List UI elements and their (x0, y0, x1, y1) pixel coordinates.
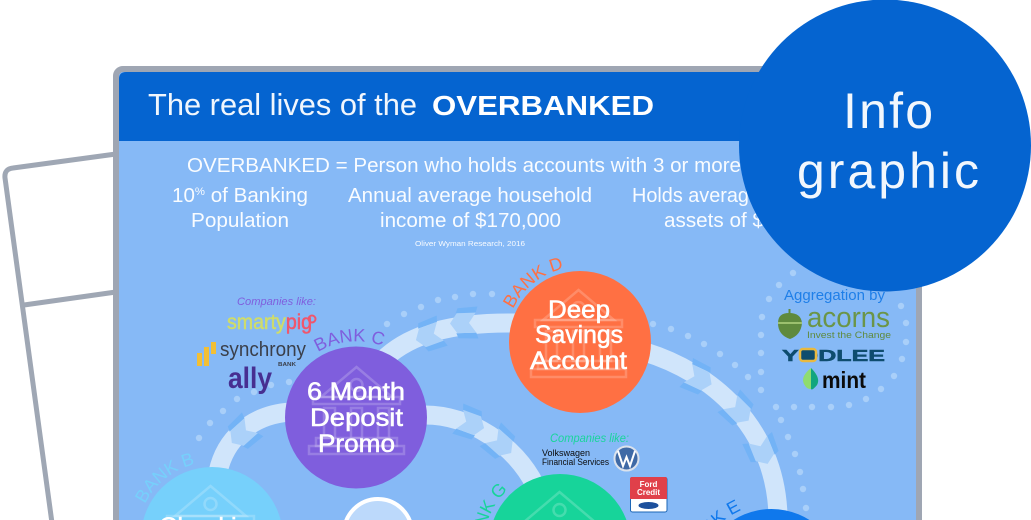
logos: aggregation: acorns (807, 302, 890, 334)
definition and stats: income of $170,000 (380, 210, 561, 232)
center white circle (344, 499, 412, 520)
roads between banks (218, 323, 778, 515)
definition and stats (172, 155, 764, 248)
title: OVERBANKED (432, 90, 654, 121)
logos: aggregation: YODLEE (782, 348, 885, 365)
logos: bank C companies: smartypig (227, 311, 312, 334)
logos: aggregation (778, 288, 891, 393)
definition and stats: OVERBANKED = Person who holds accounts with 3 or more (187, 155, 741, 177)
definition and stats: 10 (172, 185, 194, 207)
bank D: deep savings account: BANK D (502, 258, 562, 308)
bank B: checking (135, 454, 280, 520)
bank E (706, 500, 810, 520)
info badge: graphic (797, 143, 979, 199)
bank C: 6 month deposit promo: Promo (318, 430, 395, 458)
road chevrons (221, 307, 782, 470)
bank D: deep savings account: Deep (548, 296, 610, 324)
definition and stats: Holds average (632, 185, 760, 207)
definition and stats: % (195, 186, 205, 198)
logos: aggregation: mint (822, 367, 866, 393)
bank D: deep savings account: Account (530, 347, 627, 375)
definition and stats: of Banking (205, 185, 308, 207)
bank D: deep savings account (502, 258, 651, 413)
dotted paths (196, 270, 909, 511)
info badge (739, 0, 1031, 292)
bank C: 6 month deposit promo: 6 Month (307, 378, 405, 406)
logos: bank C companies: Companies like: (237, 296, 316, 308)
definition and stats: Population (191, 210, 289, 232)
bank G (475, 474, 626, 520)
logos: aggregation: Invest the Change (807, 330, 891, 341)
back card outline (5, 154, 116, 520)
logos: bank C companies (197, 296, 316, 395)
bank D: deep savings account: Savings (535, 321, 623, 349)
definition and stats: Oliver Wyman Research, 2016 (415, 239, 525, 248)
logos: bank G companies: Financial Services (542, 457, 609, 467)
logos: bank G companies: Credit (637, 488, 660, 497)
bank C: 6 month deposit promo: Deposit (310, 404, 403, 432)
title: The real lives of the (148, 87, 417, 122)
logos: aggregation: Aggregation by (784, 288, 886, 304)
logos: bank C companies: BANK (278, 362, 296, 368)
logos: bank G companies: Volkswagen (542, 448, 590, 458)
bank C: 6 month deposit promo: BANK C (314, 328, 384, 352)
main card frame (116, 69, 919, 520)
logos: bank C companies: ally (228, 362, 272, 395)
logos: bank C companies: synchrony (220, 339, 306, 361)
definition and stats: assets of $ (664, 210, 764, 232)
logos: bank G companies: Ford (640, 480, 657, 489)
definition and stats: Annual average household (348, 185, 592, 207)
bank C: 6 month deposit promo (285, 328, 427, 488)
bank B: checking: BANK B (135, 454, 193, 502)
logos: bank G companies: Companies like: (550, 433, 629, 445)
title (148, 87, 654, 122)
info badge: Info (843, 83, 933, 139)
logos: bank G companies (542, 433, 667, 512)
header band (119, 72, 916, 141)
